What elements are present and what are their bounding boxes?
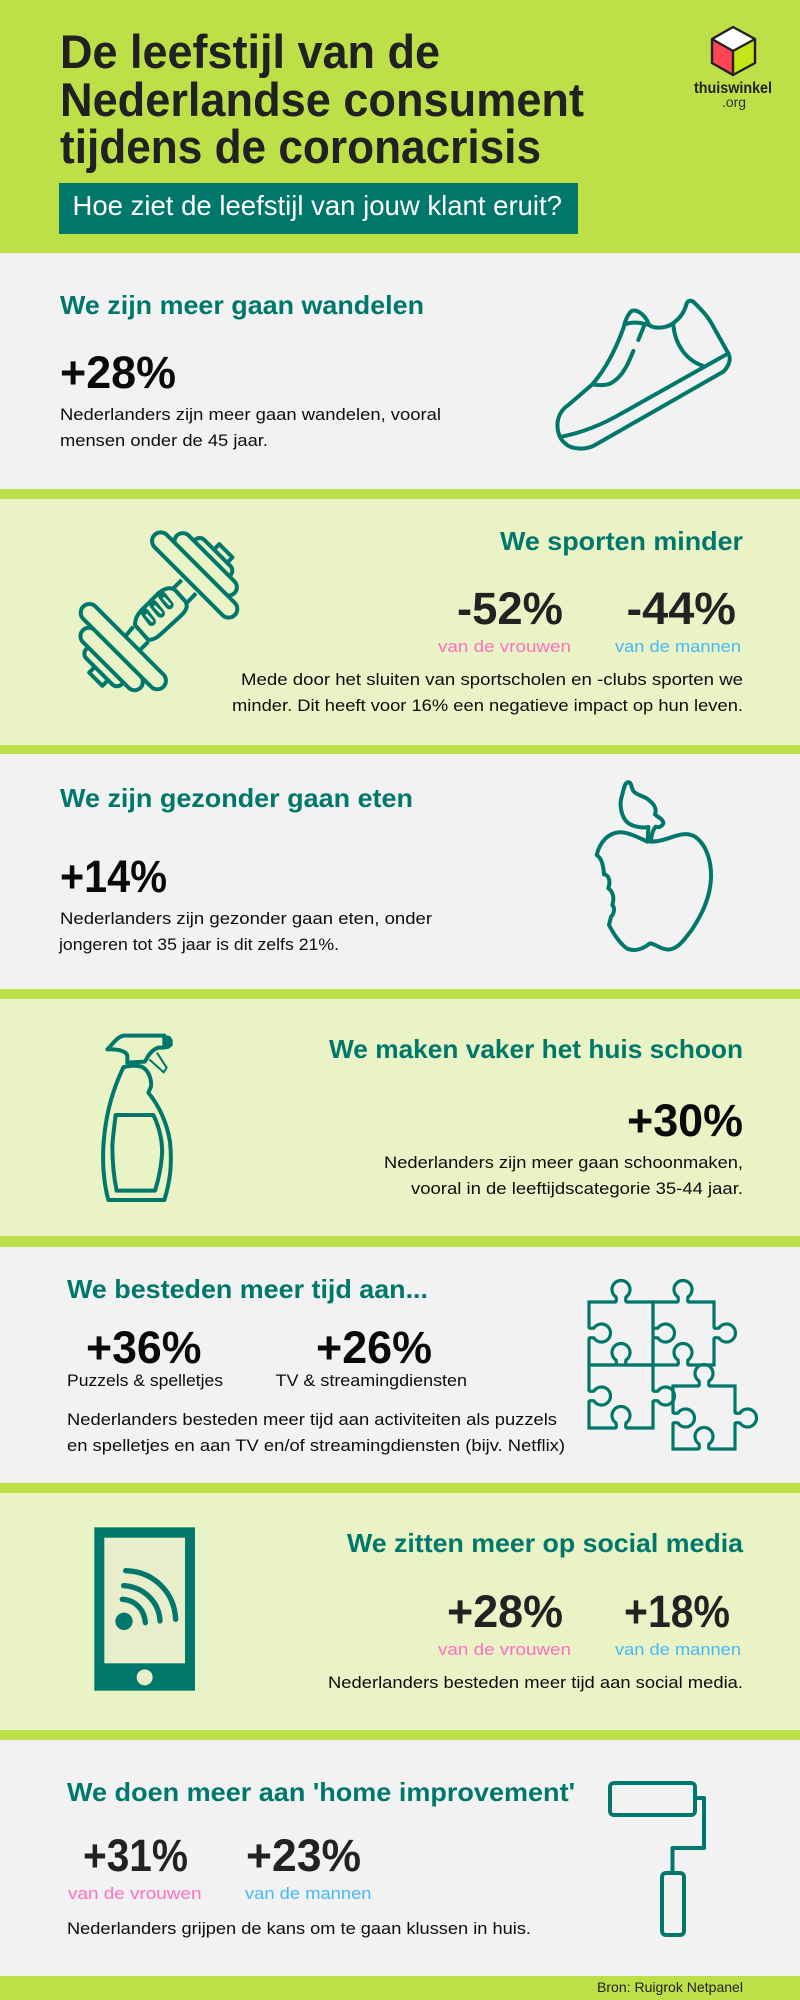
stat: +18% mannen: +18% [624, 1586, 730, 1637]
title [60, 25, 584, 173]
body text: eten: jongeren tot 35 jaar is dit zelfs 21%. [58, 935, 339, 954]
subtitle banner [59, 183, 578, 234]
stat: +14%: +14% [60, 851, 167, 902]
divider bar 5 [0, 1483, 800, 1493]
body text: sporten [232, 670, 743, 715]
body text: meer tijd [67, 1410, 565, 1455]
heading: sporten: We sporten minder [500, 526, 743, 556]
body text: meer tijd: en spelletjes en aan TV en/of streamingdiensten (bijv. Netflix) [67, 1436, 565, 1455]
icon: apple [597, 782, 711, 950]
body text: home improvement: Nederlanders grijpen de kans om te gaan klussen in huis. [67, 1919, 531, 1938]
stat: +28%: +28% [60, 347, 176, 398]
panel: home improvement [0, 1740, 800, 1976]
heading: eten: We zijn gezonder gaan eten [60, 783, 413, 813]
stat: +28% vrouwen [438, 1586, 571, 1659]
body text: wandelen [60, 405, 441, 450]
icon: phone with wifi [94, 1527, 195, 1691]
stat: -44% mannen: -44% [626, 583, 736, 634]
stat: +18% mannen: van de mannen [615, 1640, 741, 1659]
logo: thuiswinkel.org [694, 27, 772, 110]
stat: +36% puzzels: Puzzels & spelletjes [67, 1371, 223, 1390]
panel: wandelen [0, 253, 800, 489]
body text: wandelen: mensen onder de 45 jaar. [60, 431, 268, 450]
body text: wandelen: Nederlanders zijn meer gaan wandelen, vooral [60, 405, 441, 424]
body text: sporten: Mede door het sluiten van sportscholen en -clubs sporten we [241, 670, 743, 689]
stat: -52% vrouwen [438, 583, 571, 656]
heading: schoonmaken: We maken vaker het huis schoon [329, 1034, 743, 1064]
divider bar 4 [0, 1236, 800, 1247]
body text: schoonmaken: Nederlanders zijn meer gaan schoonmaken, [384, 1153, 743, 1172]
icon: puzzle pieces [589, 1281, 756, 1449]
panel: meer tijd [0, 1247, 800, 1483]
title: De leefstijl van de [60, 25, 440, 78]
footer bar with source: Bron: Ruigrok Netpanel [597, 1979, 743, 1995]
icon: spray bottle [103, 1035, 173, 1200]
body text: eten: Nederlanders zijn gezonder gaan eten, onder [60, 909, 432, 928]
stat: +26% tv: TV & streamingdiensten [276, 1371, 467, 1390]
stat: +23% mannen [245, 1830, 372, 1903]
stat: +30%: +30% [627, 1095, 743, 1146]
body text: social media: Nederlanders besteden meer tijd aan social media. [328, 1673, 743, 1692]
panel: schoonmaken [0, 999, 800, 1236]
body text: meer tijd: Nederlanders besteden meer tijd aan activiteiten als puzzels [67, 1410, 557, 1429]
stat: +31% vrouwen: +31% [83, 1830, 188, 1881]
stat: +36% puzzels [67, 1322, 223, 1390]
heading: wandelen: We zijn meer gaan wandelen [60, 290, 424, 320]
stat: +18% mannen [615, 1586, 741, 1659]
stat: +31% vrouwen [68, 1830, 202, 1903]
body text: schoonmaken: vooral in de leeftijdscategorie 35-44 jaar. [411, 1179, 743, 1198]
stat: +31% vrouwen: van de vrouwen [68, 1884, 202, 1903]
icon: shoe [557, 301, 730, 449]
stat: -44% mannen [615, 583, 741, 656]
divider bar 1 [0, 489, 800, 499]
heading: social media: We zitten meer op social media [347, 1528, 744, 1558]
heading: home improvement: We doen meer aan 'home improvement' [67, 1777, 575, 1807]
stat: -52% vrouwen: -52% [457, 583, 563, 634]
panel: social media [0, 1493, 800, 1730]
stat: +23% mannen: +23% [246, 1830, 361, 1881]
panel: gezonder eten [0, 754, 800, 989]
body text: schoonmaken [384, 1153, 743, 1198]
divider bar 6 [0, 1730, 800, 1740]
stat: +36% puzzels: +36% [86, 1322, 202, 1373]
divider bar 3 [0, 989, 800, 999]
stat: +26% tv [276, 1322, 467, 1390]
logo: thuiswinkel.org: thuiswinkel [694, 80, 772, 97]
divider bar 2 [0, 745, 800, 754]
body text: eten [58, 909, 432, 954]
icon: dumbbell [77, 529, 241, 694]
stat: +28% vrouwen: +28% [447, 1586, 563, 1637]
panel: sporten [0, 499, 800, 745]
logo: thuiswinkel.org: .org [722, 94, 746, 110]
stat: +26% tv: +26% [316, 1322, 432, 1373]
title: Nederlandse consument [60, 73, 584, 126]
panel: header [0, 0, 800, 253]
stat: +28% vrouwen: van de vrouwen [438, 1640, 571, 1659]
heading: meer tijd: We besteden meer tijd aan... [67, 1274, 428, 1304]
subtitle banner: Hoe ziet de leefstijl van jouw klant eruit? [72, 190, 562, 221]
footer bar with source [0, 1976, 800, 2000]
stat: +23% mannen: van de mannen [245, 1884, 372, 1903]
stat: -44% mannen: van de mannen [615, 637, 741, 656]
icon: paint roller [610, 1783, 704, 1935]
body text: sporten: minder. Dit heeft voor 16% een negatieve impact op hun leven. [232, 696, 743, 715]
title: tijdens de coronacrisis [60, 120, 541, 173]
stat: -52% vrouwen: van de vrouwen [438, 637, 571, 656]
